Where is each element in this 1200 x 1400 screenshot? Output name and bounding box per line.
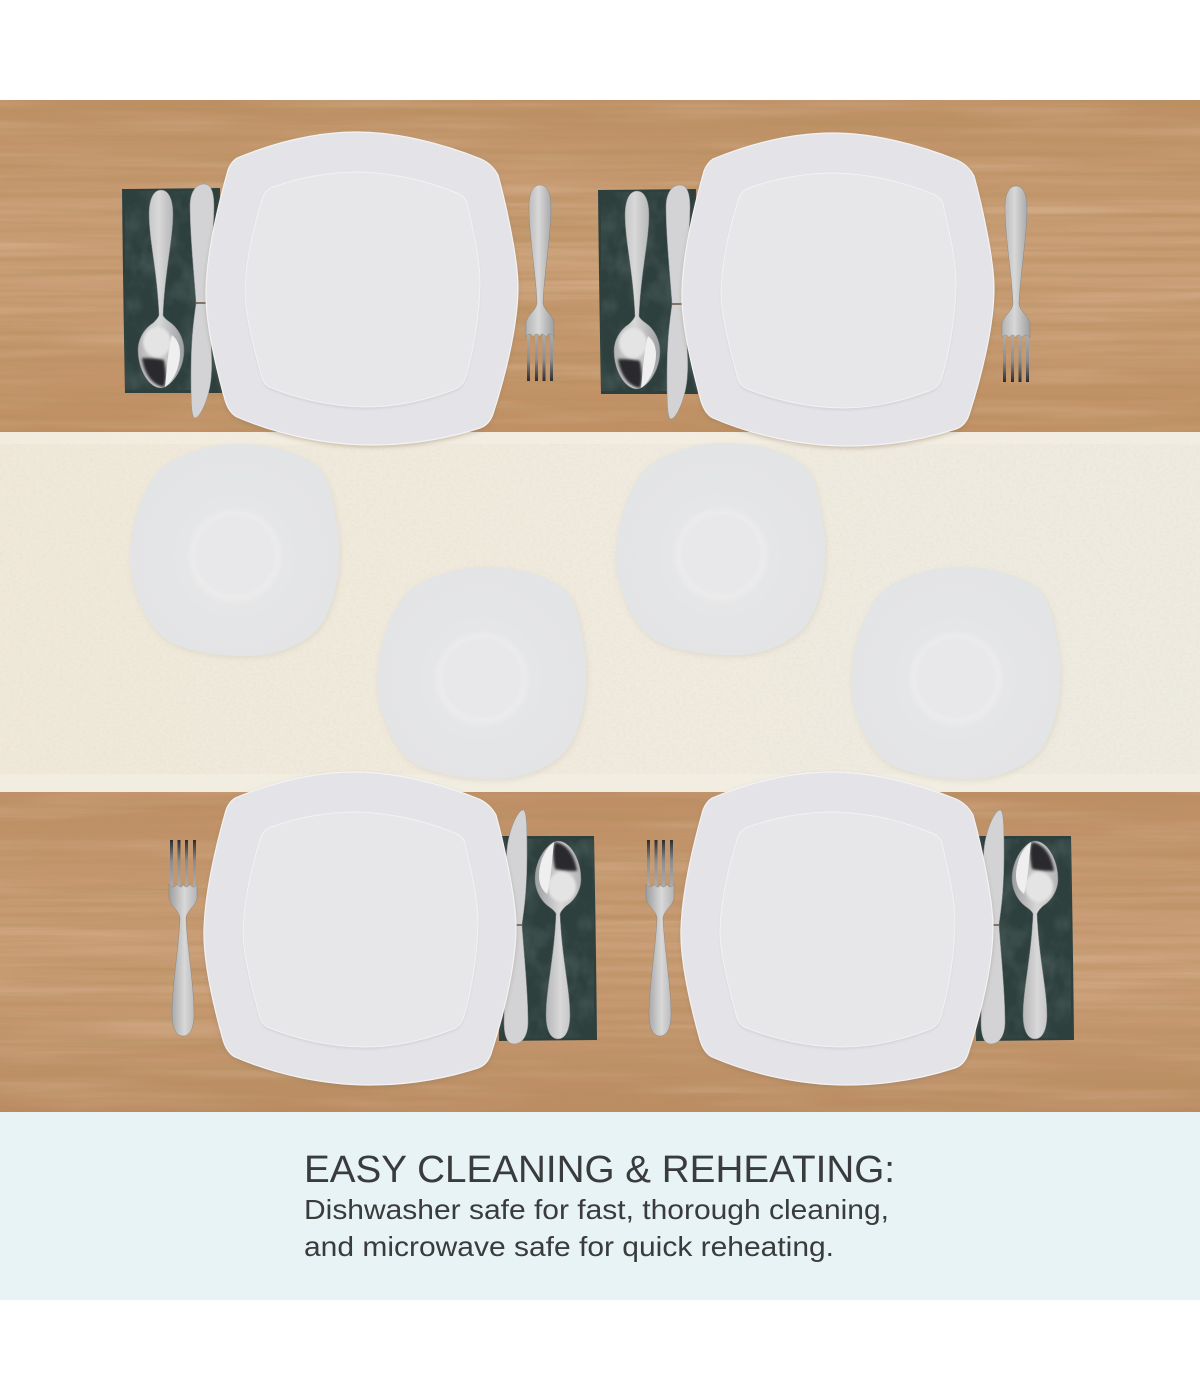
plates	[204, 772, 516, 1087]
spoon	[1012, 841, 1058, 1039]
place setting: top left	[122, 132, 554, 447]
wood table bottom	[0, 790, 1200, 1112]
spoon	[614, 191, 660, 389]
plates	[206, 132, 518, 447]
knife	[190, 184, 214, 418]
description text: and microwave safe for quick reheating.	[304, 1231, 834, 1262]
napkin	[122, 188, 222, 393]
knife	[981, 810, 1005, 1044]
fork	[646, 840, 674, 1036]
bowl: upper right	[616, 443, 826, 657]
place setting: bottom left	[169, 772, 597, 1087]
napkin	[974, 836, 1074, 1041]
spoon	[138, 190, 184, 388]
fork	[169, 840, 197, 1036]
knife	[666, 185, 690, 419]
napkin	[497, 836, 597, 1041]
plates	[681, 772, 993, 1087]
place setting: bottom right	[646, 772, 1074, 1087]
caption band	[0, 1112, 1200, 1300]
place setting: top right	[598, 133, 1030, 448]
description text	[304, 1194, 889, 1262]
knife	[504, 810, 528, 1044]
spoon	[535, 841, 581, 1039]
fork	[1002, 186, 1030, 382]
plates	[682, 133, 994, 448]
napkin	[598, 189, 698, 394]
description text: Dishwasher safe for fast, thorough cleaning,	[304, 1194, 889, 1225]
bowl: lower left	[377, 567, 587, 781]
linen table runner	[0, 432, 1200, 792]
fork	[526, 185, 554, 381]
heading: EASY CLEANING & REHEATING:	[304, 1149, 895, 1191]
bowl: upper left	[130, 444, 340, 658]
bowl: lower right	[851, 567, 1061, 781]
wood table top	[0, 100, 1200, 433]
